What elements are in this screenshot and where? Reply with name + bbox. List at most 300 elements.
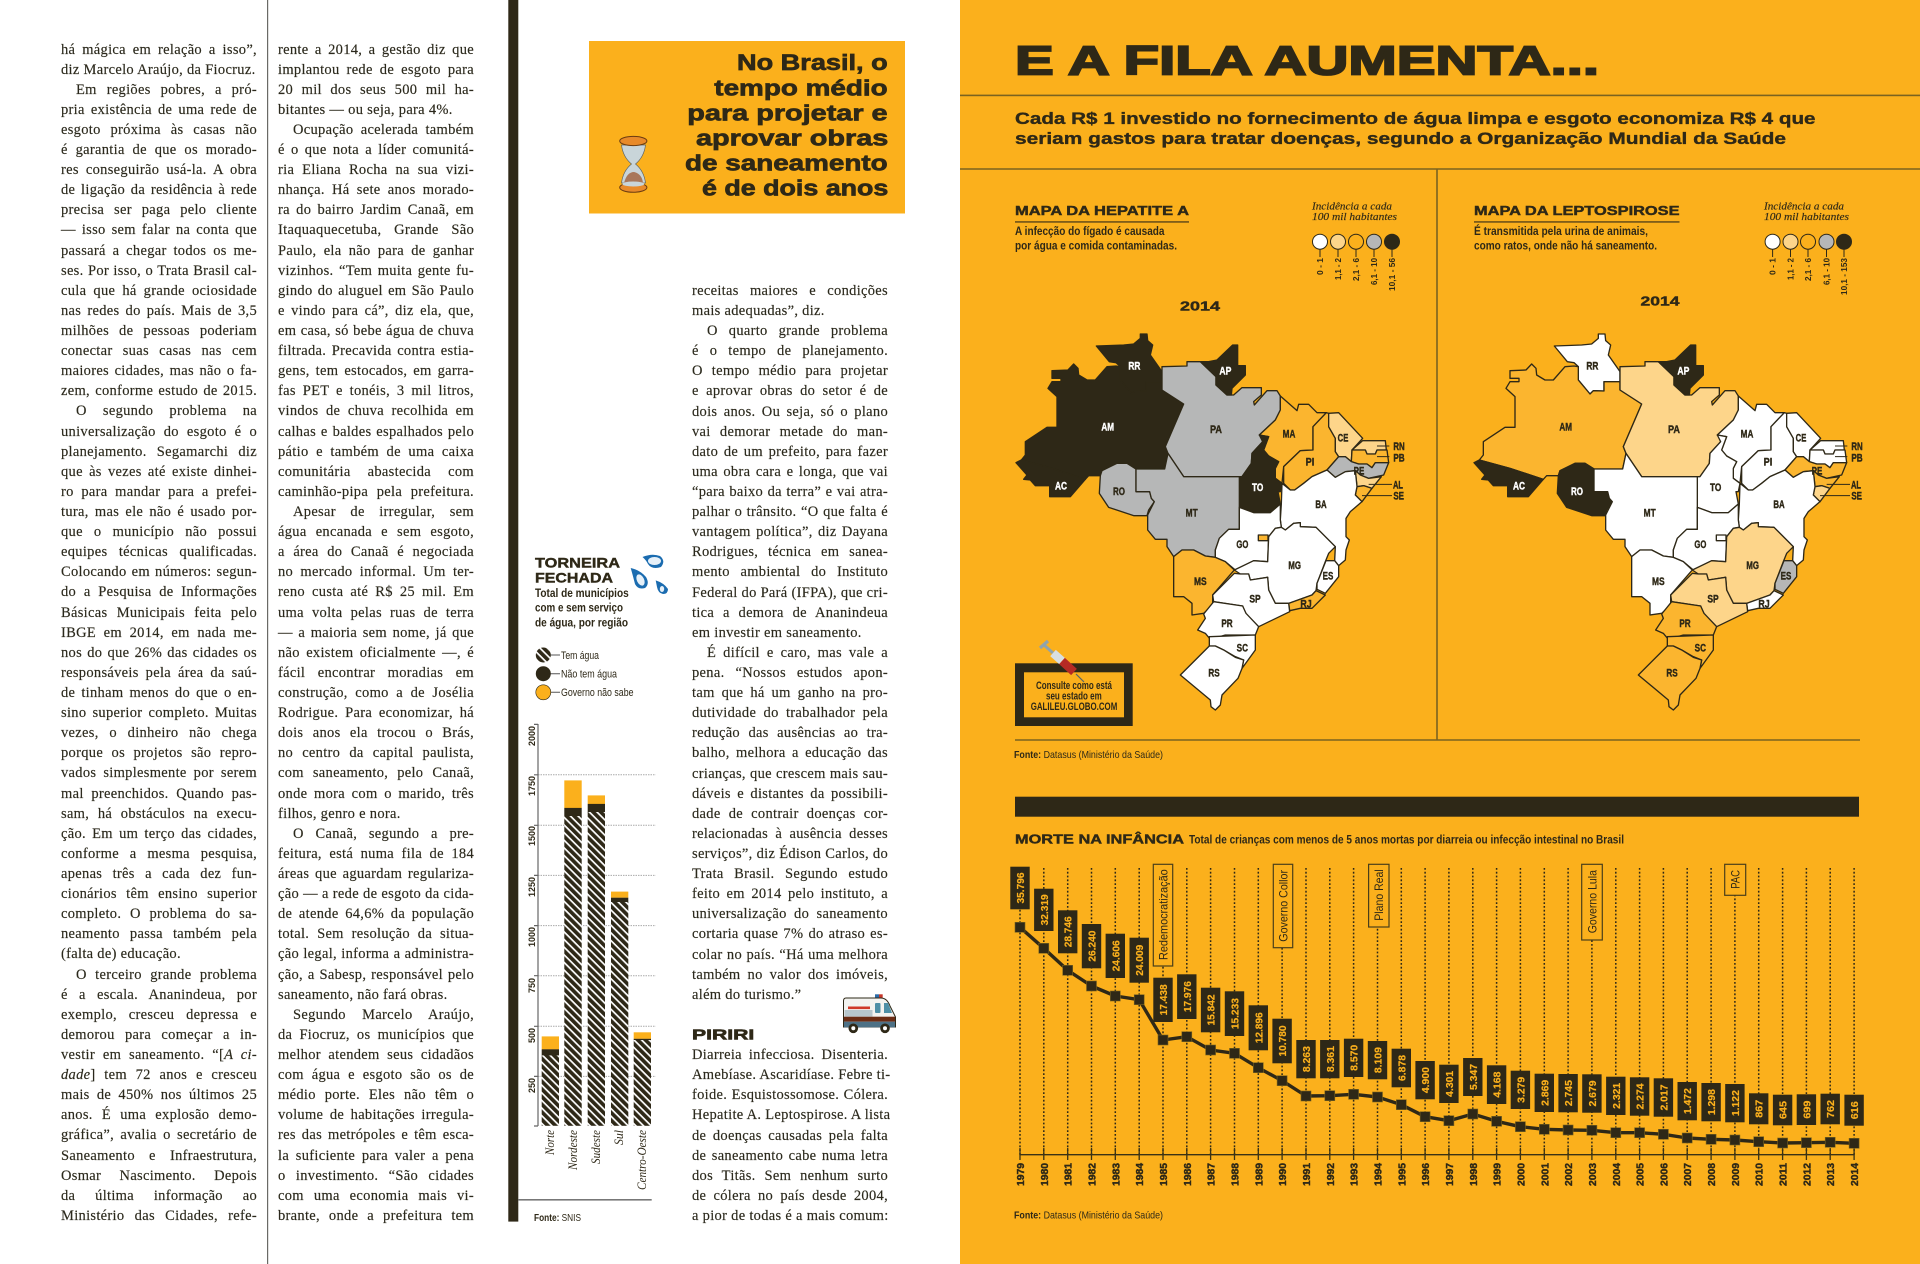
state labels: hepatite A: MT (1186, 508, 1198, 520)
text block: column 2: vindos de chuva recolhida em (278, 403, 474, 419)
heading: mapa da hepatite A (1015, 203, 1190, 252)
state labels: hepatite A: ES (1323, 571, 1333, 583)
state labels: leptospirose: PA (1668, 424, 1680, 436)
text block: column 2 (278, 42, 474, 1224)
text block: column 1: responsáveis pela área da saú- (61, 665, 257, 681)
year labels: 1983 (1111, 1163, 1122, 1186)
text block: column 1: passará a chegar todos os me- (61, 243, 257, 259)
axis labels: 750 (527, 978, 537, 993)
value labels: 8.570 (1349, 1045, 1361, 1071)
text block: column 1: que o município não possui (61, 524, 257, 540)
text block: column 1: cionários têm ensino superior (61, 886, 257, 902)
text block: column 3: “para baixo da terra” e vai atra- (692, 484, 888, 500)
axis labels: 1500 (527, 826, 537, 846)
axis labels: 1250 (527, 877, 537, 897)
value labels: 2.274 (1635, 1083, 1647, 1110)
dark vertical sidebar bar (508, 0, 518, 1222)
state labels: leptospirose: PI (1764, 456, 1772, 468)
text block: column 2: da Fiocruz, os municípios que (278, 1027, 474, 1043)
text block: column 1: mais de 450% nos últimos 25 (61, 1087, 257, 1103)
text block: column 1 (60, 42, 257, 1224)
text block: column 1: sino superior completo. Muitas (61, 705, 257, 721)
text block: column 3: mais adequadas”, diz. (692, 303, 825, 319)
axis labels: 1000 (527, 927, 537, 947)
text block: column 2: volume de habitações irregula- (278, 1107, 474, 1123)
text block: column 1: res conseguirão usá-la. A obra (61, 162, 257, 178)
text block: column 1: milhões de pessoas poderiam (61, 323, 257, 339)
year labels: 1995 (1397, 1163, 1408, 1186)
year labels: 1988 (1230, 1163, 1242, 1186)
text block: column 1: de ligação da residência à rede (61, 182, 257, 198)
year labels: 1993 (1350, 1163, 1361, 1186)
text block: column 2: implantou rede de esgoto para (278, 62, 474, 78)
value labels: 2.017 (1658, 1084, 1670, 1110)
value labels: 1.298 (1706, 1089, 1718, 1115)
text block: column 2: filtrada. Precavida contra estia- (278, 343, 474, 359)
value labels: 2.745 (1563, 1080, 1575, 1106)
text block: column 1: vados simplesmente por serem (61, 765, 257, 781)
text block: column 1: há mágica em relação a isso”, (61, 42, 257, 58)
state labels: hepatite A: CE (1338, 433, 1348, 445)
text block: column 2: Ocupação acelerada também (293, 122, 474, 138)
text block: column 2: Apesar de irregular, sem (293, 504, 474, 520)
value labels: 8.263 (1301, 1046, 1313, 1072)
text block: column 3: dade de contrair doenças cor- (692, 806, 888, 822)
text block: column 2: ção legal, informa a administra- (278, 946, 474, 962)
value labels: 12.896 (1253, 1012, 1265, 1043)
text block: column 2: médio porte. Eles não têm o (278, 1087, 474, 1103)
text block: column 3: cortaria quase 7% do atraso es- (692, 926, 888, 942)
text block: column 1: anos. É uma explosão demo- (61, 1107, 257, 1123)
text block: column 1: sam, há obstáculos na execu- (61, 806, 257, 822)
state labels: hepatite A: BA (1315, 499, 1327, 511)
state labels: hepatite A: RS (1208, 668, 1220, 680)
state labels: hepatite A: SE (1393, 491, 1404, 503)
text block: column 3: vai demorar metade do man- (692, 424, 888, 440)
states: hepatite A (1016, 334, 1389, 710)
text block: column 3: foide. Esquistossomose. Cólera. (692, 1087, 888, 1103)
text block: column 1: nos do que 26% das cidades os (61, 645, 257, 661)
text block: column 2: melhor atendem seus cidadãos (278, 1047, 474, 1063)
annotation: Redemocratizacao: Redemocratização (1156, 869, 1170, 960)
callout: pull quote: No Brasil, o (737, 50, 888, 75)
heading: mapa da hepatite A: por água e comida contaminadas. (1015, 240, 1177, 252)
legend: hepatite A: 0 - 1 (1315, 258, 1325, 275)
text block: column 3: Hepatite A. Leptospirose. A lista (692, 1107, 890, 1123)
text block: column 2: ção — a rede de esgoto da cida- (278, 886, 474, 902)
value labels: 24.606 (1110, 940, 1122, 971)
text block: column 1: porque os projetos são repro- (61, 745, 257, 761)
legend: leptospirose: 6,1 - 10 (1822, 258, 1832, 285)
state labels: leptospirose: ES (1781, 571, 1791, 583)
heading: torneira fechada: FECHADA (535, 570, 613, 586)
region labels (543, 1130, 649, 1190)
text block: column 3: Diarreia infecciosa. Disenteria. (692, 1047, 888, 1063)
state labels: leptospirose: RJ (1758, 599, 1770, 611)
text block: column 1: da última informação ao (61, 1188, 257, 1204)
text block: column 2: gindo do aluguel em São Paulo (278, 283, 474, 299)
text block: column 3: feito em 2014 pelo instituto, a (692, 886, 888, 902)
heading: piriri: PIRIRI (692, 1028, 754, 1044)
text block: column 3: colar no país. “Há uma melhora (692, 947, 888, 963)
state labels: leptospirose: RO (1571, 486, 1583, 498)
source: bar chart: Fonte: SNIS (534, 1212, 581, 1224)
text block: column 1: demorou para começar a in- (61, 1027, 257, 1043)
subtitle (1015, 110, 1816, 148)
state labels: hepatite A: SC (1237, 643, 1248, 655)
text block: column 2: total. Sem resolução da situa- (278, 926, 474, 942)
panel dividers (960, 169, 1920, 740)
callout: pull quote: tempo médio (714, 75, 888, 100)
state labels: leptospirose: PR (1679, 618, 1691, 630)
text block: column 2: brante, onde a prefeitura tem (278, 1208, 474, 1224)
text block: column 3: de cólera no país desde 2004, (692, 1188, 888, 1204)
state labels: hepatite A: AM (1101, 422, 1114, 434)
text block: column 2: uma volta pelas ruas de terra (278, 605, 474, 621)
legend: bar chart: Governo não sabe (561, 687, 634, 699)
state labels: hepatite A: SP (1249, 594, 1261, 606)
text block: column 1: neamento passa também pela (61, 926, 257, 942)
text block: column 1: equipes técnicas qualificadas. (61, 544, 257, 560)
text block: column 2: filhos, genro e nora. (278, 806, 401, 822)
text block: column 2: 20 mil dos seus 500 mil ha- (278, 82, 474, 98)
year labels: 1985 (1159, 1163, 1170, 1186)
callout: pull quote: de saneamento (685, 151, 888, 176)
axis labels (527, 726, 537, 1093)
value labels: 4.168 (1492, 1071, 1504, 1098)
heading: torneira fechada: TORNEIRA (535, 554, 620, 570)
year labels: 2011 (1779, 1163, 1790, 1186)
x axis (1020, 1148, 1854, 1160)
value labels (1015, 872, 1861, 1119)
state labels: hepatite A (1055, 360, 1405, 680)
legend: hepatite A: 1,1 - 2 (1333, 258, 1343, 280)
value labels: 5.347 (1468, 1064, 1480, 1090)
data markers (1015, 922, 1859, 1148)
year labels: 2006 (1659, 1163, 1670, 1186)
text block: column 2: ria Eliana Rocha na sua vizi- (278, 162, 474, 178)
text block: column 2: comunitária abastecida com (278, 464, 474, 480)
value labels: 15.842 (1206, 994, 1218, 1026)
callout: consulte galileu (1015, 641, 1133, 726)
year labels: 2009 (1731, 1163, 1742, 1186)
year labels: 1979 (1016, 1163, 1027, 1186)
text block: column 1: conectar suas casas nas cem (61, 343, 257, 359)
region labels: Centro-Oeste (635, 1130, 649, 1190)
year labels: 1989 (1254, 1163, 1265, 1186)
text block: column 2: saneamento, não fará obras. (278, 987, 448, 1003)
annotation: Governo Lula: Governo Lula (1585, 870, 1599, 933)
text block: column 3: relacionadas à ausência desses (692, 826, 888, 842)
text block: column 2: fas PET e tonéis, 3 mil litros, (278, 383, 474, 399)
text block: column 2: fácil encontrar moradias em (278, 665, 474, 681)
axis labels: 2000 (527, 726, 537, 746)
heading: torneira fechada: de água, por região (535, 618, 628, 630)
callout: consulte galileu: seu estado em (1046, 690, 1102, 702)
text block: column 3: tam que há um ganho na pro- (692, 685, 888, 701)
value labels: 616 (1849, 1101, 1861, 1119)
year labels: 2002 (1564, 1163, 1575, 1186)
map: hepatite A (1016, 334, 1405, 710)
text block: column 1: ção. Em um terço das cidades, (61, 826, 257, 842)
state labels: hepatite A: RR (1128, 360, 1140, 372)
axis labels: 1750 (527, 776, 537, 796)
state labels: hepatite A: MS (1194, 576, 1207, 588)
text block: column 2: é o que nota a líder comunitá- (278, 142, 474, 158)
value boxes (1010, 867, 1864, 1126)
text block: column 2: rente a 2014, a gestão diz que (278, 42, 474, 58)
year labels: 2001 (1540, 1163, 1551, 1186)
text block: column 1: ro para mandar para a prefei- (61, 484, 257, 500)
state labels: leptospirose: AL (1851, 479, 1861, 491)
text block: column 2: água encanada e sem esgoto, (278, 524, 474, 540)
heading: mapa da hepatite A: MAPA DA HEPATITE A (1015, 203, 1190, 218)
legend: leptospirose: 1,1 - 2 (1786, 258, 1796, 280)
text block: column 1: Saneamento e Infraestrutura, (61, 1148, 257, 1164)
year labels: 2000 (1516, 1163, 1527, 1186)
text block: column 3: Rodrigues, técnica em sanea- (692, 544, 888, 560)
text block: column 3: Amebíase. Ascaridíase. Febre ti- (692, 1067, 890, 1083)
annotation: Redemocratizacao (1153, 864, 1173, 966)
text block: column 1: Básicas Municipais feita pelo (61, 605, 257, 621)
heading: mapa da leptospirose: É transmitida pela urina de animais, (1474, 225, 1648, 238)
text block: column 1: apenas três a cada dez fun- (61, 866, 257, 882)
text block: column 2: Segundo Marcelo Araújo, (293, 1007, 474, 1023)
state labels: hepatite A: MG (1288, 560, 1301, 572)
text block: column 1: pria existência de uma rede de (61, 102, 257, 118)
value labels: 2.679 (1587, 1080, 1599, 1106)
legend: bar chart: Não tem água (561, 668, 618, 680)
text block: column 3: a pior de todas é a mais comum: (692, 1208, 889, 1224)
state labels: leptospirose: AM (1559, 422, 1572, 434)
text block: column 2: de atende 64,6% da população (278, 906, 474, 922)
leader lines: hepatite A (1362, 446, 1392, 496)
text block: column 2: áreas que aguardam regulariza- (278, 866, 474, 882)
year labels: 1984 (1135, 1163, 1146, 1186)
text block: column 1: que às vezes até existe dinhei- (61, 464, 257, 480)
text block: column 2: Itaquaquecetuba, Grande São (278, 222, 474, 238)
state labels: leptospirose: AC (1513, 480, 1525, 492)
text block: column 1: universalização do esgoto é o (61, 424, 257, 440)
state labels: leptospirose: RS (1666, 668, 1678, 680)
states: leptospirose (1474, 334, 1847, 710)
line chart: morte na infancia (1010, 864, 1864, 1186)
text block: column 1: Em regiões pobres, a pró- (76, 82, 257, 98)
text block: column 3: palhar o trânsito. “O que falta é (692, 504, 888, 520)
text block: column 2: em casa, só bebe água de chuva (278, 323, 474, 339)
text block: column 1: Colocando em números: segun- (61, 564, 257, 580)
text block: column 3: dato de um prefeito, para fazer (692, 444, 888, 460)
value labels: 6.878 (1396, 1055, 1408, 1081)
text block: column 2: la suficiente para valer a pena (278, 1148, 474, 1164)
state labels: leptospirose: MA (1741, 428, 1753, 440)
state labels: hepatite A: PB (1393, 452, 1405, 464)
state labels: hepatite A: RN (1393, 441, 1405, 453)
text block: column 3: universalização do saneamento (692, 906, 888, 922)
text block: column 1: cula que há grande ociosidade (61, 283, 257, 299)
text block: column 3: O tempo médio para projetar (692, 363, 888, 379)
heading: mapa da leptospirose: MAPA DA LEPTOSPIROSE (1474, 203, 1680, 218)
heading: morte na infancia (1015, 832, 1624, 846)
year labels: 2012 (1802, 1163, 1813, 1186)
text block: column 1: conforme a mesma pesquisa, (61, 846, 257, 862)
state labels: hepatite A: PI (1306, 456, 1314, 468)
text block: column 3: uma obra cara e longa, que vai (692, 464, 888, 480)
text block: column 3: balho, melhora a educação das (692, 745, 888, 761)
value labels: 10.780 (1277, 1025, 1289, 1056)
year labels: 2004 (1612, 1163, 1623, 1186)
data line (1020, 927, 1854, 1143)
state labels: leptospirose: RN (1851, 441, 1863, 453)
text block: column 1: mal preenchidos. Quando pas- (61, 786, 257, 802)
value labels: 3.279 (1515, 1077, 1527, 1103)
value labels: 2.321 (1611, 1083, 1623, 1109)
text block: column 2: — a maioria sem nome, já que (278, 625, 474, 641)
leader lines: leptospirose (1820, 446, 1850, 496)
text block: column 2: com água e esgoto são os de (278, 1067, 474, 1083)
text block: column 2: vizinhos. “Tem muita gente fu- (278, 263, 474, 279)
year labels: 1990 (1278, 1163, 1289, 1186)
text block: column 1: vezes, o dinheiro não chega (61, 725, 257, 741)
text block: column 2: feitura, está numa fila de 184 (278, 846, 474, 862)
text block: column 1: O segundo problema na (76, 403, 257, 419)
text block: column 2: pátio e também de uma caixa (278, 444, 474, 460)
year label: map B: 2014 (1640, 294, 1681, 308)
year labels: 1986 (1183, 1163, 1194, 1186)
state labels: hepatite A: AC (1055, 480, 1067, 492)
value labels: 645 (1778, 1101, 1790, 1119)
icon: water drops (631, 555, 668, 594)
text block: column 2: ção, a Sabesp, responsável pelo (278, 967, 474, 983)
text block: column 1: é garantia de que os morado- (61, 142, 257, 158)
heading: mapa da leptospirose: como ratos, onde não há saneamento. (1474, 240, 1657, 252)
subtitle: seriam gastos para tratar doenças, segundo a Organização Mundial da Saúde (1015, 130, 1786, 148)
text block: column 2: com saneamento, pelo Canaã, (278, 765, 474, 781)
text block: column 2: res das metrópoles e têm esca- (278, 1127, 474, 1143)
legend: hepatite A (1311, 200, 1400, 291)
legend: leptospirose: Incidência a cada (1763, 200, 1844, 212)
legend: leptospirose: 0 - 1 (1768, 258, 1778, 275)
text block: column 3: de saneamento cabe numa letra (692, 1148, 888, 1164)
state labels: leptospirose: SE (1851, 491, 1862, 503)
year labels: 1994 (1374, 1163, 1384, 1186)
text block: column 1: Ministério das Cidades, refe- (61, 1208, 257, 1224)
text block: column 2: o investimento. “São cidades (278, 1168, 474, 1184)
value labels: 4.900 (1420, 1067, 1432, 1093)
text block: column 2: O Canaã, segundo a pre- (293, 826, 474, 842)
text block: column 2: no mercado informal. Um ter- (278, 564, 474, 580)
text block: column 3: pena. “Nossos estudos apon- (692, 665, 888, 681)
text block: column 3: em investir em saneamento. (692, 625, 862, 641)
source: map: Fonte: Datasus (Ministério da Saúde) (1014, 749, 1163, 761)
state labels: leptospirose: AP (1677, 366, 1689, 378)
column divider (267, 0, 268, 1264)
text block: column 1: diz Marcelo Araújo, da Fiocruz. (61, 62, 256, 78)
text block: column 2: calhas e baldes espalhados pelo (278, 424, 474, 440)
legend: leptospirose: 2,1 - 6 (1803, 258, 1813, 281)
state labels: leptospirose: MS (1652, 576, 1665, 588)
text block: column 3: de doenças causadas pela falta (692, 1128, 888, 1144)
legend: leptospirose (1763, 200, 1852, 295)
text block: column 2: e vindo para cá”, diz ela, que, (278, 303, 474, 319)
subtitle: Cada R$ 1 investido no fornecimento de água limpa e esgoto economiza R$ 4 que (1015, 110, 1816, 128)
text block: column 2: Rodrigue. Para economizar, há (278, 705, 474, 721)
value labels: 2.869 (1539, 1080, 1551, 1106)
legend: hepatite A: 2,1 - 6 (1351, 258, 1361, 281)
state labels: hepatite A: AL (1393, 479, 1403, 491)
text block: column 2: a área do Canaã é negociada (278, 544, 474, 560)
text block: column 3: dutividade do trabalhador pela (692, 705, 888, 721)
state labels: hepatite A: MA (1283, 428, 1295, 440)
text block: column 1: nas redes do país. Mais de 3,5 (61, 303, 257, 319)
state labels: hepatite A: TO (1252, 482, 1264, 494)
year labels (1016, 1163, 1861, 1186)
text block: column 3: vantagem política”, diz Dayana (692, 524, 888, 540)
text block: column 3: O quarto grande problema (707, 323, 888, 339)
text block: column 2: não existem oficialmente —, é (278, 645, 474, 661)
header divider (960, 95, 1920, 96)
annotation: Plano Real: Plano Real (1372, 869, 1386, 921)
heading: mapa da hepatite A: A infecção do fígado é causada (1015, 226, 1165, 238)
state labels: hepatite A: GO (1236, 539, 1249, 551)
legend: hepatite A: 6,1 - 10 (1369, 258, 1379, 285)
text block: column 1: do a Pesquisa de Informações (61, 584, 257, 600)
annotation: PAC (1725, 864, 1746, 895)
year labels: 1980 (1040, 1163, 1051, 1186)
heading: torneira fechada: Total de municípios (535, 588, 629, 600)
text block: column 1: maiores cidades, mas não o fa- (61, 363, 257, 379)
text block: column 2: nhança. Há sete anos morado- (278, 182, 474, 198)
annotation: Governo Collor (1273, 864, 1293, 948)
source: line chart: Fonte: Datasus (Ministério da Saúde) (1014, 1210, 1163, 1222)
legend: leptospirose: 10,1 - 153 (1839, 258, 1849, 295)
state labels: leptospirose: MT (1644, 508, 1656, 520)
state labels: hepatite A: PA (1210, 424, 1222, 436)
value labels: 762 (1825, 1100, 1837, 1118)
text block: column 3: tica a demora de Ananindeua (692, 605, 888, 621)
region labels: Norte (543, 1130, 557, 1156)
axis labels: 250 (527, 1078, 537, 1093)
text block: column 1: completo. O problema do sa- (61, 906, 257, 922)
state labels: leptospirose: RR (1586, 360, 1598, 372)
year labels: 2003 (1588, 1163, 1599, 1186)
legend: hepatite A: Incidência a cada (1311, 200, 1392, 212)
state labels: hepatite A: RJ (1300, 599, 1312, 611)
state labels: leptospirose (1513, 360, 1863, 680)
value labels: 15.233 (1230, 998, 1242, 1029)
source: bar chart (518, 1199, 652, 1224)
state labels: hepatite A: PE (1354, 465, 1364, 477)
text block: column 2: onde mora com o marido, três (278, 786, 474, 802)
text block: column 3: Federal do Pará (IFPA), que cri- (692, 585, 888, 601)
year label: map A: 2014 (1180, 298, 1221, 314)
text block: column 2: dois anos ela trocou o Brás, (278, 725, 474, 741)
text block: column 3: mento ambiental do Instituto (692, 564, 888, 580)
text block: column 1: vestir em saneamento. “[A ci- (61, 1047, 257, 1063)
legend: hepatite A: 100 mil habitantes (1312, 211, 1397, 223)
state labels: leptospirose: CE (1796, 433, 1806, 445)
annotation: Governo Lula (1582, 864, 1602, 940)
bar chart: municipios por regiao (527, 724, 656, 1190)
text block: column 1: Osmar Nascimento. Depois (61, 1168, 257, 1184)
value labels: 17.976 (1182, 981, 1194, 1012)
value labels: 32.319 (1039, 894, 1051, 925)
year labels: 2005 (1636, 1163, 1647, 1186)
text block: column 3: além do turismo.” (692, 987, 801, 1003)
text block: column 1: planejamento. Segamarchi diz (61, 444, 257, 460)
year labels: 1991 (1302, 1163, 1313, 1186)
year labels: 1982 (1088, 1163, 1098, 1186)
